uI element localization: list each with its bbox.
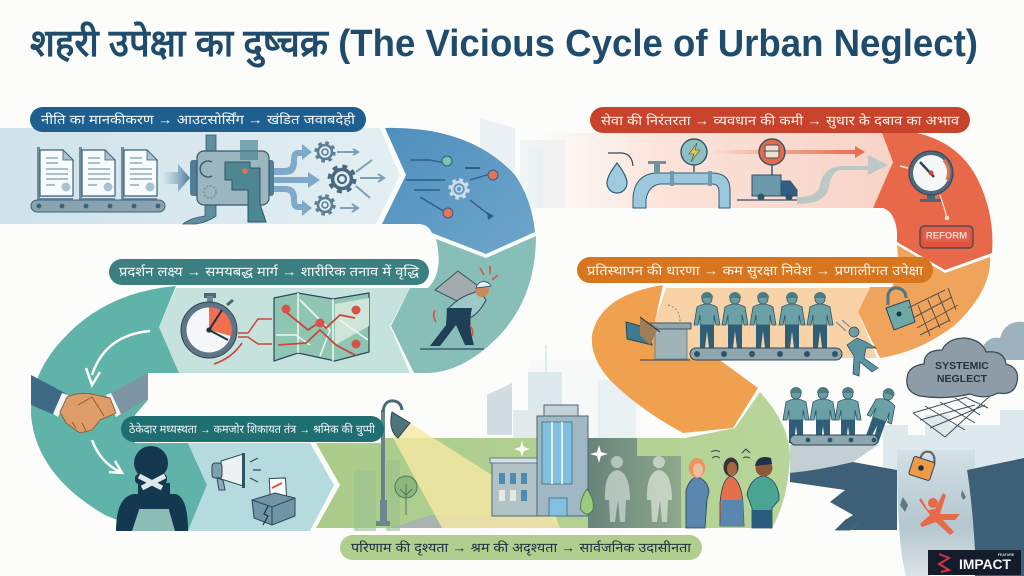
panel: service continuity band — [533, 133, 893, 208]
icon: low building — [490, 458, 537, 516]
icon: open lock — [886, 288, 915, 330]
icon: pressure gauge — [900, 151, 953, 220]
heading pill: visibility — [340, 535, 702, 560]
heading pill: outsourcing — [30, 107, 366, 132]
panel: systemic neglect orange chevron — [858, 245, 990, 358]
icon: electricity circle — [681, 139, 707, 172]
icon: concerned public — [686, 449, 779, 528]
arrows: stopwatch to map — [238, 319, 272, 344]
icon: glass tower — [537, 405, 588, 516]
icon: transport circle — [759, 139, 785, 175]
icon: discard box and table — [626, 305, 691, 360]
icon: silenced worker — [116, 446, 188, 531]
icon: street lamp — [376, 401, 410, 526]
arrow: into machine — [162, 164, 190, 192]
icon: stopwatch — [181, 293, 242, 364]
icon: systemic neglect cloud — [907, 338, 1018, 398]
icon: workers on broken conveyor — [783, 384, 903, 446]
arrow: long red — [710, 146, 865, 158]
icon: workers on conveyor — [690, 292, 842, 360]
logo badge: IMPACT: IMPACT — [959, 556, 1011, 572]
heading pill: service — [590, 107, 970, 133]
icon: systemic neglect cloud: SYSTEMIC — [935, 360, 989, 372]
heading pill: service: सेवा की निरंतरता → व्यवधान की कमी → सुधार के दबाव का अभाव — [601, 113, 960, 129]
panel: outsourcing band — [0, 128, 400, 224]
arrows: split outputs — [274, 144, 320, 216]
panel: contractor mediation curve — [31, 286, 207, 531]
icon: torn net under cloud — [913, 396, 990, 437]
icon: fallen orange padlock — [908, 452, 935, 481]
icon: scattered gear network — [406, 156, 498, 220]
icon: gears — [316, 143, 384, 214]
icon: torn safety net — [908, 288, 958, 336]
icon: grey platform and cliff edge — [790, 445, 1024, 576]
icon: worker with heavy load — [420, 266, 498, 349]
icon: tree — [395, 476, 417, 515]
icon: invisible workers — [605, 456, 672, 522]
icon: truck — [737, 175, 800, 200]
heading pill: contractor: ठेकेदार मध्यस्थता → कमजोर शिकायत तंत्र → श्रमिक की चुप्पी — [129, 422, 376, 437]
arrow: curved white down — [92, 440, 122, 473]
icon: road — [392, 515, 560, 528]
icon: falling fragments — [900, 490, 966, 512]
logo badge: IMPACT: FEATURE — [998, 553, 1015, 557]
icon: systemic neglect cloud: NEGLECT — [937, 373, 988, 385]
panel: lack of reform pressure chevron — [873, 133, 992, 270]
arrow: curved white — [86, 331, 150, 385]
panel: replaceable workers band — [592, 285, 878, 433]
icon: falling worker — [836, 320, 878, 376]
background: fog in the chasm — [897, 450, 975, 576]
title: शहरी उपेक्षा का दुष्चक्र (The Vicious Cycle of Urban Neglect) — [30, 21, 978, 68]
shape: faded city blocks — [354, 460, 400, 531]
arrow: grey road arrow — [797, 155, 888, 204]
heading pill: performance — [109, 259, 429, 285]
icon: documents on conveyor — [31, 147, 165, 212]
icon: route map — [274, 293, 369, 361]
icon: megaphone — [212, 453, 261, 490]
icon: reform button: REFORM — [926, 230, 967, 242]
panel: physical stress chevron — [391, 236, 536, 373]
panel: fragmented accountability chevron — [382, 128, 535, 254]
icon: water drop — [607, 153, 633, 193]
icon: cracked complaint box — [252, 476, 295, 525]
icon: outsourcing machine — [183, 135, 274, 224]
heading pill: outsourcing: नीति का मानकीकरण → आउटसोर्सिंग → खंडित जवाबदेही — [41, 112, 356, 127]
panel: timed route band — [159, 288, 410, 373]
heading pill: contractor — [121, 416, 384, 442]
icon: back cloud — [980, 322, 1024, 360]
icon: handshake — [31, 373, 148, 433]
heading pill: replacement — [577, 257, 933, 283]
logo badge: IMPACT — [928, 550, 1021, 575]
shape: dark panel behind invisible workers — [588, 438, 681, 528]
heading pill: replacement: प्रतिस्थापन की धारणा → कम सुरक्षा निवेश → प्रणालीगत उपेक्षा — [587, 263, 924, 279]
icon: light beam — [392, 423, 560, 528]
icon: tap and pipe — [633, 161, 730, 208]
heading pill: visibility: परिणाम की दृश्यता → श्रम की अदृश्यता → सार्वजनिक उदासीनता — [351, 540, 692, 556]
icon: falling person — [919, 493, 960, 535]
background: faint city skyline — [480, 118, 1024, 470]
icon: sparkles — [514, 441, 608, 463]
panel: orange curve — [592, 285, 758, 433]
icon: small tree by tower — [581, 489, 593, 514]
panel: weak grievance band — [188, 443, 334, 531]
panel: visibility green band — [316, 392, 790, 531]
heading pill: performance: प्रदर्शन लक्ष्य → समयबद्ध मार्ग → शारीरिक तनाव में वृद्धि — [119, 264, 420, 280]
